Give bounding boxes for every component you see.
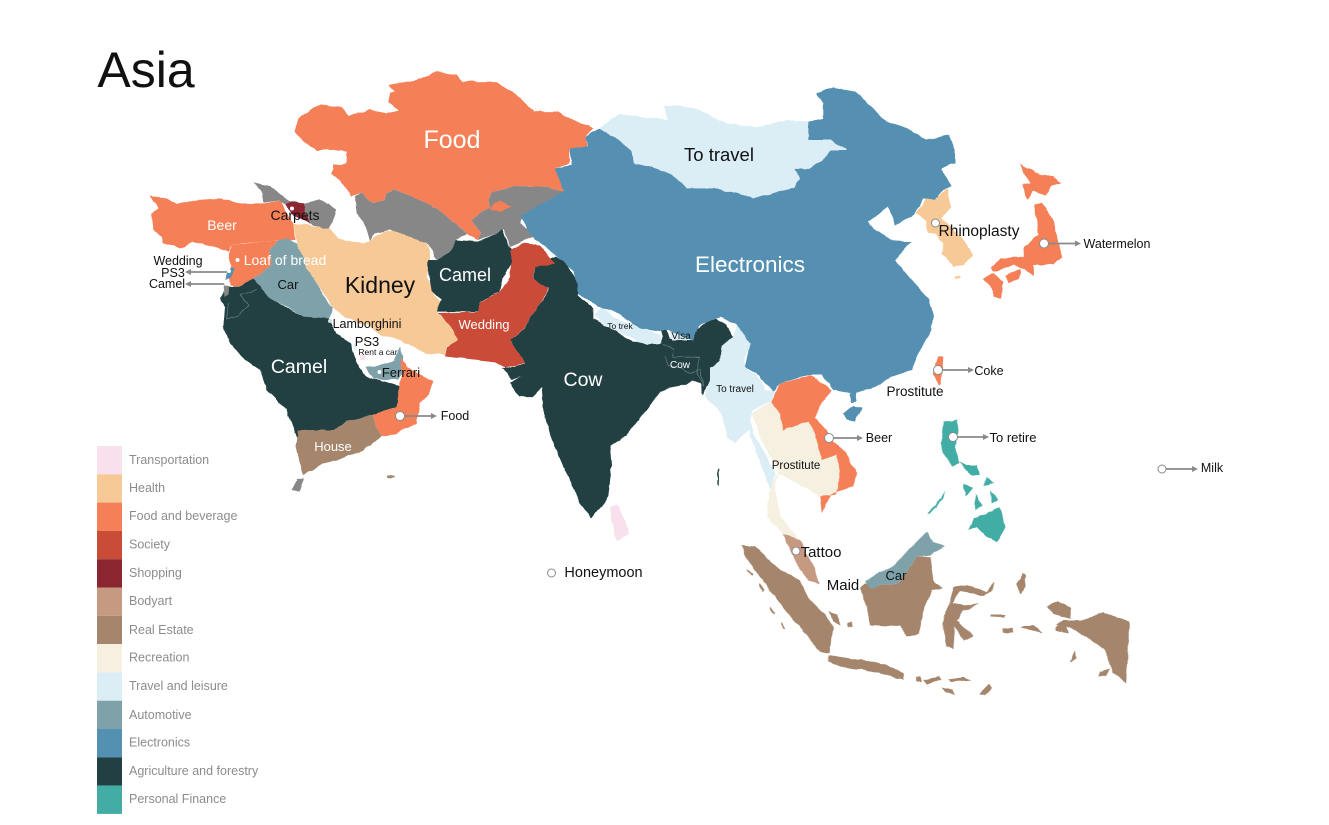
map: South Asia (502, 257, 775, 540)
island: Borneo Indonesia (860, 557, 943, 637)
arrow: Oman (396, 412, 437, 420)
pin: Kuwait (328, 319, 332, 323)
legend item: Recreation (97, 644, 189, 672)
country: Peninsular Malaysia (783, 533, 819, 583)
country: Oman (372, 358, 433, 437)
island: Taiwan (933, 356, 943, 387)
country: Turkmenistan and Uzbekistan (355, 190, 467, 260)
island: Socotra (386, 476, 395, 478)
label: UAE: Ferrari (382, 365, 420, 380)
label: Maldives: Honeymoon (564, 565, 643, 581)
island: Honshu (990, 203, 1062, 277)
legend item: Agriculture and forestry (97, 757, 259, 786)
arrow: Japan (1040, 239, 1081, 248)
country: Israel (223, 287, 229, 297)
island: Java (828, 655, 903, 680)
legend item: Automotive (97, 701, 192, 729)
country: Afghanistan (428, 230, 513, 312)
legend item: Electronics: Electronics (129, 736, 190, 750)
legend item: Recreation: Recreation (129, 650, 189, 664)
country: Philippines (927, 420, 1006, 543)
legend item: Personal Finance: Personal Finance (129, 792, 226, 806)
pin: Syria (236, 258, 240, 262)
country: Georgia and Azerbaijan (253, 183, 337, 229)
title: Asia (97, 42, 195, 98)
label: Pakistan: Wedding (458, 317, 510, 332)
legend item: Bodyart (97, 588, 173, 616)
label: Thailand: Prostitute (772, 460, 820, 472)
label: Palestine: Wedding (153, 254, 203, 268)
legend item: Automotive: Automotive (129, 708, 192, 722)
legend item: Electronics (97, 729, 190, 757)
legend item: Health: Health (129, 481, 165, 495)
label: Israel: Camel (149, 277, 185, 291)
label: Oman: Food (441, 409, 469, 423)
country: East Malaysia (865, 532, 945, 588)
label: Myanmar: To travel (716, 384, 754, 395)
legend item: Personal Finance (97, 786, 226, 814)
label: Syria: Loaf of bread (244, 252, 326, 268)
legend item: Society (97, 531, 171, 559)
legend item: Society: Society (129, 538, 171, 552)
label: China: Electronics (695, 252, 805, 277)
label: Malaysia: Tattoo (801, 544, 841, 561)
country: India and Bangladesh (502, 257, 733, 518)
label: Taiwan: Coke (974, 364, 1004, 378)
border: Bangladesh (663, 345, 703, 387)
country: Djibouti area (292, 478, 304, 492)
label: Bhutan: Visa (671, 331, 691, 342)
country: Syria (228, 241, 278, 287)
country: UAE (365, 347, 403, 380)
label: Turkey: Beer (207, 217, 237, 233)
label: Qatar: PS3 (355, 334, 379, 349)
label: Japan: Watermelon (1084, 237, 1151, 251)
legend item: Health (97, 474, 165, 503)
strait: Hainan link (849, 393, 857, 403)
map labels (149, 126, 1224, 594)
label: Bahrain: Rent a car (358, 347, 398, 357)
label: Iran: Kidney (345, 272, 416, 298)
arrow: Guam (1158, 465, 1198, 473)
label: Guam: Milk (1201, 461, 1224, 475)
label: Singapore: Maid (827, 577, 859, 594)
country: Lebanon (225, 268, 234, 281)
country: Armenia (285, 203, 310, 223)
label: Saudi Arabia: Camel (271, 356, 327, 378)
label: India: Cow (563, 369, 603, 391)
label: Vietnam: Beer (866, 431, 892, 445)
country: Saudi Arabia and Jordan (220, 278, 400, 440)
legend item: Bodyart: Bodyart (129, 594, 173, 608)
country: Myanmar (705, 325, 775, 493)
country: Sri Lanka (610, 503, 628, 540)
country: Pakistan (437, 243, 555, 368)
border: Jordan (227, 290, 257, 318)
map: East Asia mainland (520, 87, 955, 422)
map: Central Asia (295, 72, 593, 312)
arrow: Israel (185, 281, 228, 287)
label: Mongolia: To travel (684, 144, 754, 165)
country: Mongolia (598, 105, 847, 198)
country: Nepal (593, 307, 662, 345)
islands: Andaman (717, 468, 719, 487)
pin: Armenia (290, 206, 294, 210)
label: Iraq: Car (278, 277, 299, 292)
island: Sulawesi (943, 582, 995, 650)
legend item: Real Estate (97, 616, 194, 644)
arrow: Vietnam (824, 434, 863, 442)
label: Yemen: House (314, 439, 352, 454)
pin: UAE (378, 370, 382, 374)
legend item: Transportation: Transportation (129, 453, 209, 467)
label: Philippines: To retire (990, 430, 1036, 445)
label: Kuwait: Lamborghini (333, 317, 401, 331)
legend (97, 446, 259, 814)
island: Shikoku (1005, 270, 1020, 283)
islands: Sumatra outlying (747, 569, 853, 628)
label: Armenia: Carpets (270, 207, 320, 223)
island: Hokkaido (1019, 163, 1062, 200)
label: Nepal: To trek (607, 321, 634, 331)
country: Laos and Vietnam (771, 375, 857, 513)
country: Turkey (150, 197, 295, 252)
label: Afghanistan: Camel (439, 265, 491, 285)
island: Jeju (955, 276, 961, 279)
map: Korea, Japan, Taiwan (915, 163, 1062, 387)
country: Iraq (253, 239, 333, 318)
island: Sumatra (742, 545, 833, 653)
pin: Korea (932, 219, 940, 227)
country: Qatar and Kuwait (354, 343, 357, 350)
label: Bangladesh: Cow (670, 360, 691, 371)
arrow: Taiwan (934, 366, 974, 374)
label: Hong Kong: Prostitute (886, 384, 944, 399)
map: Middle East (150, 183, 458, 492)
country: China (520, 87, 955, 393)
country: Kazakhstan (295, 72, 593, 240)
legend item: Travel and leisure (97, 672, 228, 701)
legend item: Travel and leisure: Travel and leisure (129, 679, 228, 693)
country: Iran (293, 223, 458, 355)
arrow: Lebanon (185, 269, 231, 275)
legend item: Food and beverage (97, 503, 237, 531)
callout pins and arrows (185, 206, 1198, 577)
islands: Maluku (990, 573, 1110, 677)
legend item: Shopping: Shopping (129, 566, 182, 580)
islands: Lesser Sunda (916, 677, 992, 696)
island: Papua (1055, 612, 1129, 683)
pin: Malaysia (792, 547, 800, 555)
country: Bahrain (359, 355, 365, 362)
arrow: Philippines (948, 432, 989, 442)
label: Lebanon: PS3 (161, 266, 185, 280)
legend item: Transportation (97, 446, 209, 474)
country: Korea (915, 188, 973, 267)
exclave: Uzbekistan valley (490, 201, 512, 212)
country: Thailand and Cambodia (752, 402, 842, 540)
map (150, 72, 1129, 696)
map: South-East Asia (742, 375, 1129, 696)
island: Hainan (843, 405, 862, 422)
label: Kazakhstan: Food (424, 126, 480, 154)
label: East Malaysia: Car (886, 568, 907, 583)
legend item: Real Estate: Real Estate (129, 623, 194, 637)
pin: Maldives (548, 569, 556, 577)
country: Bhutan (670, 327, 692, 340)
legend item: Food and beverage: Food and beverage (129, 509, 237, 523)
label: Korea: Rhinoplasty (938, 223, 1020, 240)
legend item: Shopping (97, 559, 182, 588)
country: Yemen (296, 415, 382, 475)
island: Kyushu (983, 273, 1003, 298)
legend item: Agriculture and forestry: Agriculture and forestry (129, 764, 259, 778)
country: Kyrgyzstan and Tajikistan (472, 186, 563, 247)
